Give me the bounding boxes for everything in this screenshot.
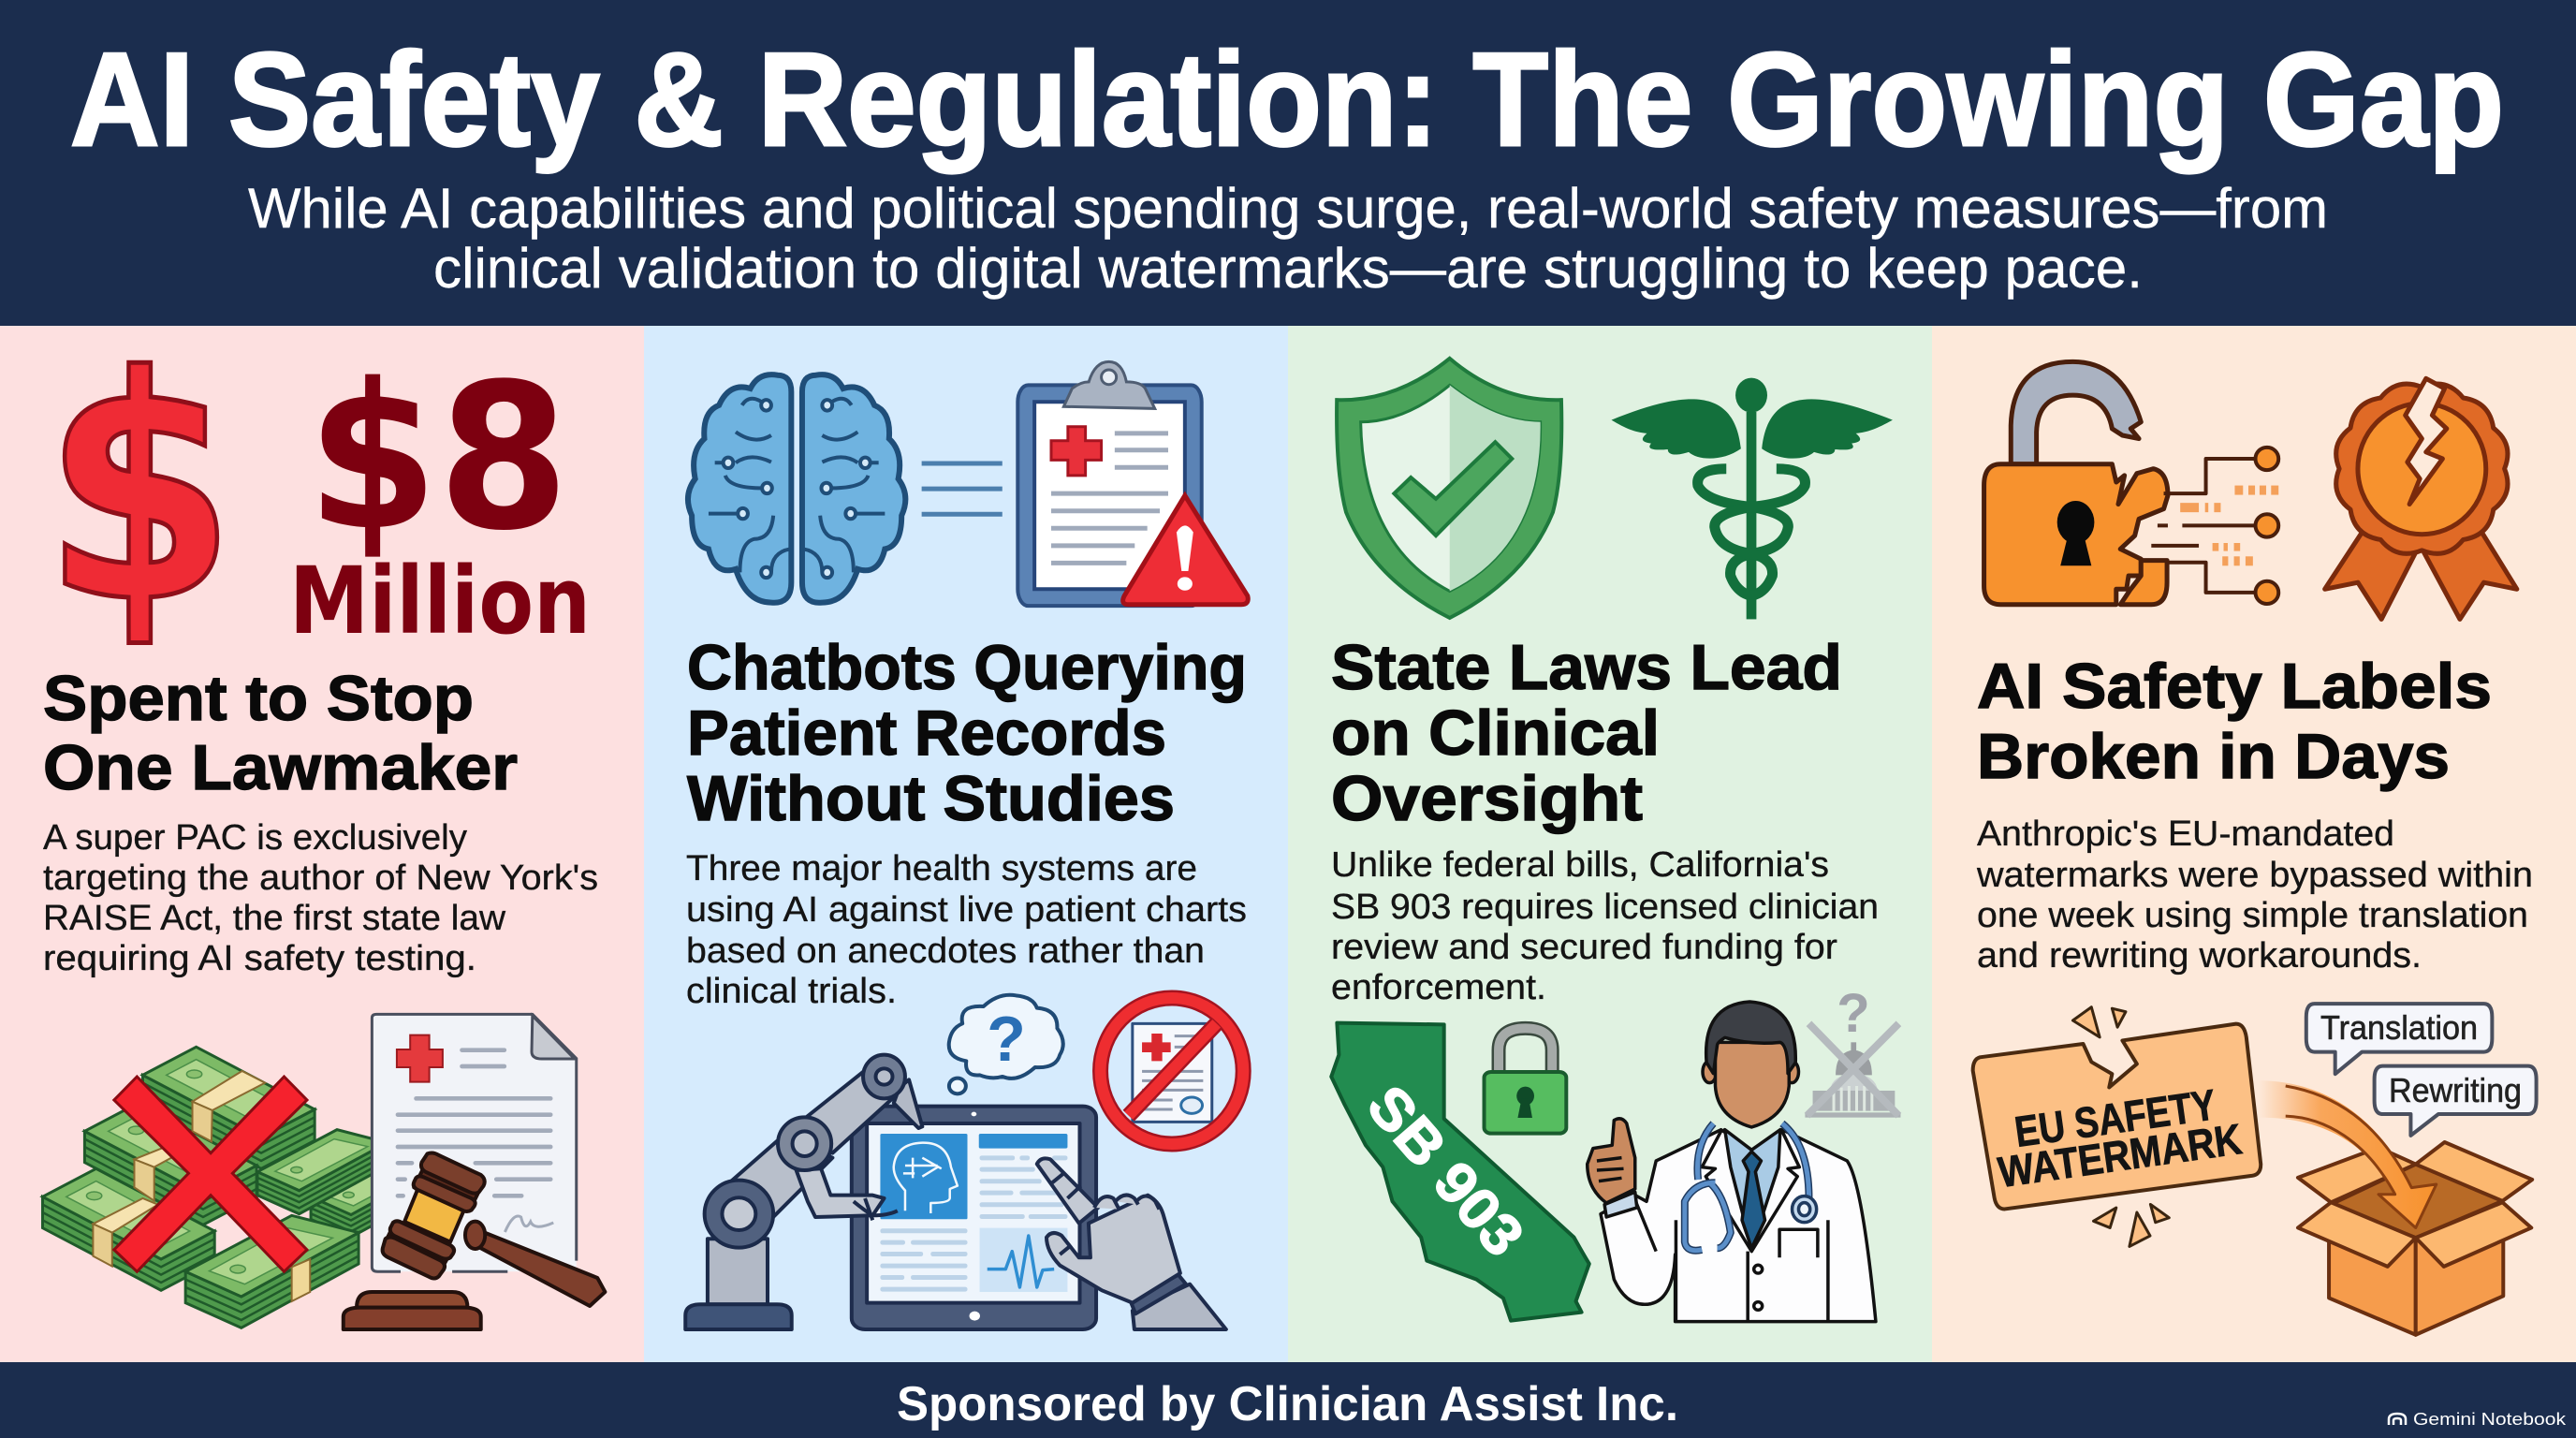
body text: SB 903: SB 903 requires licensed clinician	[1331, 888, 1879, 927]
icon: shield with check	[1337, 359, 1561, 618]
body text: watermarks	[1976, 814, 2533, 976]
body text: super PAC: RAISE Act, the first state law	[43, 899, 506, 938]
panel: super PAC spending	[0, 311, 644, 1362]
body text: watermarks: Anthropic's EU-mandated	[1977, 814, 2394, 854]
icon text: question mark: ?	[987, 1004, 1026, 1075]
icon: doctor	[1588, 1002, 1876, 1322]
heading: state laws lead: State Laws Lead	[1331, 632, 1842, 703]
icon: red X	[114, 1077, 307, 1271]
heading: state laws lead: on Clinical	[1331, 697, 1660, 769]
stat: $8: $8	[307, 340, 569, 575]
card label: EU safety watermark	[1995, 1079, 2245, 1196]
icon: medical document	[372, 1014, 577, 1271]
icon: robot hand	[1037, 1158, 1226, 1329]
heading: state laws lead	[1331, 632, 1842, 834]
body text: SB 903	[1331, 845, 1879, 1007]
body text: health systems: based on anecdotes rather than	[686, 932, 1205, 971]
arrow: watermark to box	[2259, 1080, 2437, 1227]
body text: SB 903: review and secured funding for	[1331, 928, 1837, 967]
body text: health systems	[686, 849, 1247, 1011]
body text: watermarks: watermarks were bypassed within	[1976, 856, 2533, 895]
panel: state laws	[1288, 326, 1932, 1362]
stat unit: Million: Million	[289, 548, 591, 655]
heading: chatbots querying patient records: Chatbots Querying	[687, 632, 1247, 703]
illustration: broken watermark card into box	[1973, 1004, 2537, 1335]
icon: caduceus	[1611, 378, 1893, 619]
illustration: crossed-out cash, medical document and gavel	[43, 1014, 605, 1329]
sponsor line: Sponsored by Clinician Assist Inc.	[897, 1377, 1678, 1431]
icon: cracked badge	[2325, 378, 2517, 619]
body text: super PAC: requiring AI safety testing.	[43, 939, 476, 978]
heading: spent to stop one lawmaker: One Lawmaker	[43, 732, 518, 803]
icon: tablet	[852, 1107, 1096, 1329]
map label: SB 903: SB 903	[1354, 1074, 1536, 1269]
heading: chatbots querying patient records: Patient Records	[687, 697, 1166, 769]
subtitle: While AI capabilities and political spending surge, real-world safety measures—from	[248, 177, 2328, 240]
footer band	[0, 1362, 2576, 1438]
header band	[0, 0, 2576, 326]
body text: watermarks: one week using simple translation	[1977, 896, 2528, 935]
heading: chatbots querying patient records	[687, 632, 1247, 834]
heading: AI safety labels broken	[1977, 651, 2492, 792]
watermark: Gemini Notebook: Gemini Notebook	[2413, 1410, 2567, 1429]
icon: red dollar sign: $	[43, 311, 236, 670]
icon: stacks of cash	[43, 1047, 435, 1328]
body text: health systems: Three major health systems are	[686, 849, 1197, 888]
illustration: shield and caduceus	[1337, 359, 1893, 619]
body text: health systems: using AI against live patient charts	[686, 890, 1247, 930]
body text: watermarks: and rewriting workarounds.	[1977, 936, 2422, 976]
icon: no-records symbol	[1101, 998, 1243, 1144]
icon: circuit brain	[688, 374, 905, 603]
panel: chatbots querying records	[644, 326, 1288, 1362]
icon: California map	[1331, 1023, 1589, 1321]
card label: EU safety watermark: WATERMARK	[1995, 1114, 2245, 1196]
heading: AI safety labels broken: AI Safety Labels	[1977, 651, 2492, 722]
callout: watermark card	[1973, 1024, 2261, 1209]
icon: broken padlock with circuits	[1984, 361, 2278, 605]
body text: super PAC	[43, 818, 598, 978]
body text: SB 903: enforcement.	[1331, 968, 1546, 1007]
callout bubble: translation	[2306, 1004, 2492, 1074]
icon: equals lines	[922, 463, 1003, 514]
icon: warning triangle	[1123, 495, 1248, 605]
illustration: robot arm, tablet and robot hand	[685, 995, 1243, 1329]
icon: thought bubble	[949, 995, 1063, 1093]
illustration: brain, clipboard and warning	[688, 361, 1248, 606]
body text: SB 903: Unlike federal bills, California's	[1331, 845, 1829, 885]
icon: clipboard	[1017, 361, 1202, 606]
bubble text: Rewriting: Rewriting	[2389, 1071, 2522, 1109]
icon: gavel	[344, 1152, 605, 1329]
heading: spent to stop one lawmaker	[43, 663, 518, 803]
illustration: broken lock, circuit and badge	[1984, 361, 2517, 619]
heading: spent to stop one lawmaker: Spent to Stop	[43, 663, 474, 734]
icon: card fragments	[2072, 1007, 2169, 1246]
icon: open box	[2298, 1142, 2532, 1335]
body text: super PAC: targeting the author of New York's	[43, 858, 598, 898]
heading: AI safety labels broken: Broken in Days	[1977, 721, 2450, 792]
heading: chatbots querying patient records: Without Studies	[687, 763, 1175, 834]
subtitle	[248, 177, 2328, 300]
card label: EU safety watermark: EU SAFETY	[2012, 1079, 2218, 1156]
heading: state laws lead: Oversight	[1331, 763, 1643, 834]
bubble text: Translation: Translation	[2320, 1008, 2478, 1047]
icon text: grey question mark: ?	[1837, 983, 1870, 1044]
body text: super PAC: A super PAC is exclusively	[43, 818, 467, 858]
icon: green padlock	[1485, 1028, 1566, 1134]
body text: health systems: clinical trials.	[686, 972, 897, 1011]
illustration: California, lock, doctor, capitol	[1331, 983, 1900, 1322]
callout bubble: rewriting	[2375, 1066, 2537, 1136]
icon: capitol crossed out	[1805, 1023, 1900, 1118]
subtitle: clinical validation to digital watermarks—are struggling to keep pace.	[433, 237, 2143, 300]
panel: labels broken	[1932, 326, 2576, 1362]
icon: robot arm	[685, 1055, 922, 1329]
